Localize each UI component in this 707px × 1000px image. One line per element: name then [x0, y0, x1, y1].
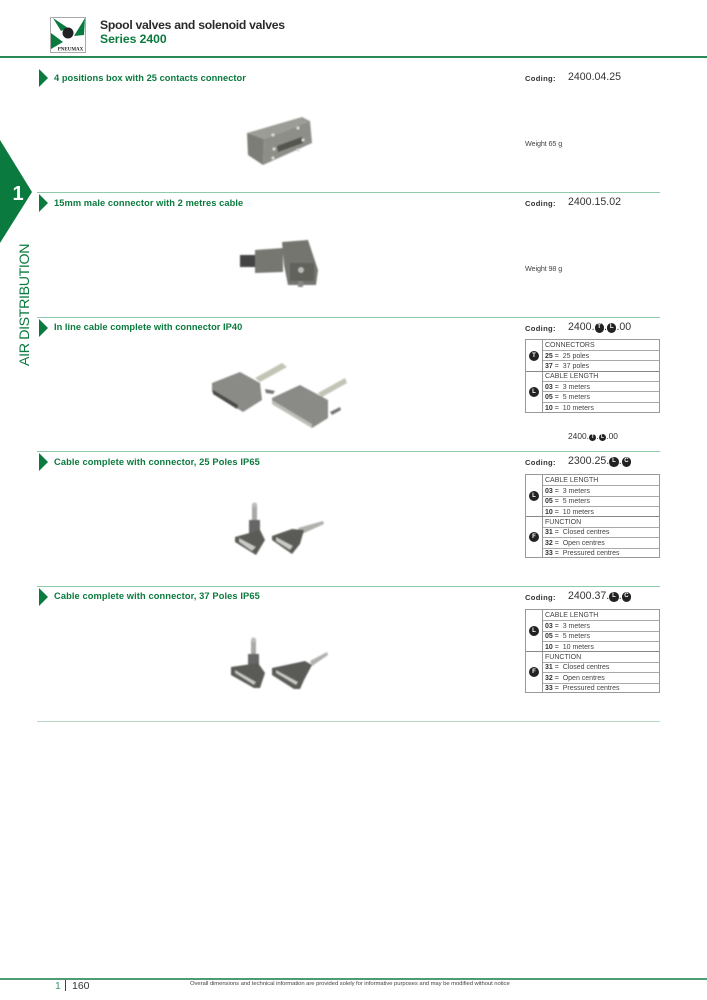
divider	[37, 586, 660, 587]
symbol L: L	[532, 628, 536, 634]
row 33: 33 = Pressured centres	[545, 685, 620, 692]
row 10: 10 = 10 meters	[545, 644, 594, 650]
symbol F	[526, 651, 543, 692]
row lines	[543, 350, 659, 403]
logo	[50, 17, 86, 53]
section 3 code repeat: 2400. . .00	[568, 431, 618, 441]
chapter number: 1	[12, 183, 24, 205]
section 3 coding label: Coding:	[525, 324, 556, 333]
function header: FUNCTION	[545, 519, 581, 526]
section 5 code: C	[624, 593, 629, 599]
connectors header: CONNECTORS	[545, 342, 595, 349]
subtitle: Series 2400	[100, 32, 167, 46]
symbol T	[526, 340, 543, 371]
header rule	[0, 56, 707, 58]
symbol T: T	[532, 352, 536, 358]
divider	[37, 451, 660, 452]
photo: 4 positions box	[246, 116, 313, 166]
section 4 code: 2300.25. .	[568, 455, 622, 467]
section 3 code repeat: L	[601, 434, 604, 440]
section 1 code: 2400.04.25	[568, 71, 621, 83]
section 4 code: C	[624, 458, 629, 464]
symbol F: F	[532, 534, 536, 540]
row 03: 03 = 3 meters	[545, 488, 590, 494]
symbol L	[526, 371, 543, 412]
footer page number: 160	[72, 980, 90, 992]
row lines	[543, 620, 659, 684]
cable length header: CABLE LENGTH	[545, 373, 598, 380]
symbol L	[526, 475, 543, 516]
divider	[37, 317, 660, 318]
section 1 weight: Weight 65 g	[525, 139, 562, 148]
section 3 code: L	[610, 324, 614, 330]
row 31: 31 = Closed centres	[545, 529, 609, 536]
row lines	[543, 485, 659, 549]
group separator	[526, 370, 659, 372]
photo: IP40 connectors	[211, 362, 348, 428]
row 10: 10 = 10 meters	[545, 404, 594, 412]
row 25: 25 = 25 poles	[545, 352, 589, 360]
section 1 coding label: Coding:	[525, 74, 556, 83]
row 03: 03 = 3 meters	[545, 622, 590, 630]
cable length header: CABLE LENGTH	[545, 612, 598, 619]
footer separator	[65, 980, 66, 991]
footer disclaimer: Overall dimensions and technical information are provided solely for informative purposes and may be modified without notice	[190, 980, 510, 986]
row 03: 03 = 3 meters	[545, 384, 590, 390]
symbol L	[526, 610, 543, 651]
symbol L: L	[532, 492, 536, 498]
footer rule	[0, 978, 707, 980]
section 1 heading: 4 positions box with 25 contacts connector	[54, 73, 246, 83]
symbol F: F	[532, 668, 536, 674]
photo: 25 poles IP65	[234, 502, 324, 556]
chapter tab	[0, 140, 32, 243]
section 5 coding label: Coding:	[525, 593, 556, 602]
photo: 37 poles IP65	[230, 637, 328, 690]
row 05: 05 = 5 meters	[545, 633, 590, 640]
section 4 heading: Cable complete with connector, 25 Poles IP65	[54, 457, 260, 467]
section 4 code: L	[612, 458, 616, 464]
footer chapter number: 1	[55, 980, 61, 992]
section 5 heading: Cable complete with connector, 37 Poles IP65	[54, 591, 260, 601]
section 3 code: 2400. . .00	[568, 321, 631, 333]
row 10: 10 = 10 meters	[545, 508, 594, 516]
title: Spool valves and solenoid valves	[100, 18, 285, 32]
section 2 weight: Weight 98 g	[525, 264, 562, 273]
function header: FUNCTION	[545, 654, 581, 661]
section 4 arrow	[39, 453, 48, 471]
section 3 code: T	[597, 324, 601, 330]
row 31: 31 = Closed centres	[545, 664, 609, 671]
logo: PNEUMAX	[58, 48, 84, 52]
table: cable length and function	[525, 609, 660, 693]
section 2 arrow	[39, 194, 48, 212]
row 32: 32 = Open centres	[545, 674, 605, 682]
group separator	[526, 651, 659, 652]
table: connectors and cable length	[525, 339, 660, 413]
section 2 coding label: Coding:	[525, 199, 556, 208]
row 05: 05 = 5 meters	[545, 394, 590, 401]
section 4 coding label: Coding:	[525, 458, 556, 467]
cable length header: CABLE LENGTH	[545, 477, 598, 484]
bottom divider	[37, 721, 660, 722]
section 5 code: L	[612, 593, 616, 599]
photo: male connector	[239, 239, 319, 288]
row 33: 33 = Pressured centres	[545, 550, 620, 557]
section 1 arrow	[39, 69, 48, 87]
section 3 arrow	[39, 319, 48, 337]
group separator	[526, 516, 659, 517]
section 3 code repeat: T	[591, 434, 594, 440]
side label: AIR DISTRIBUTION	[17, 244, 33, 366]
section 2 heading: 15mm male connector with 2 metres cable	[54, 198, 243, 208]
row 37: 37 = 37 poles	[545, 363, 589, 370]
table: cable length and function	[525, 474, 660, 558]
section 3 heading: In line cable complete with connector IP40	[54, 322, 242, 332]
row 32: 32 = Open centres	[545, 540, 605, 546]
divider	[37, 192, 660, 193]
symbol F	[526, 516, 543, 557]
section 5 code: 2400.37. .	[568, 590, 622, 602]
section 5 arrow	[39, 588, 48, 606]
symbol L: L	[532, 388, 536, 394]
row 05: 05 = 5 meters	[545, 498, 590, 505]
section 2 code: 2400.15.02	[568, 196, 621, 208]
